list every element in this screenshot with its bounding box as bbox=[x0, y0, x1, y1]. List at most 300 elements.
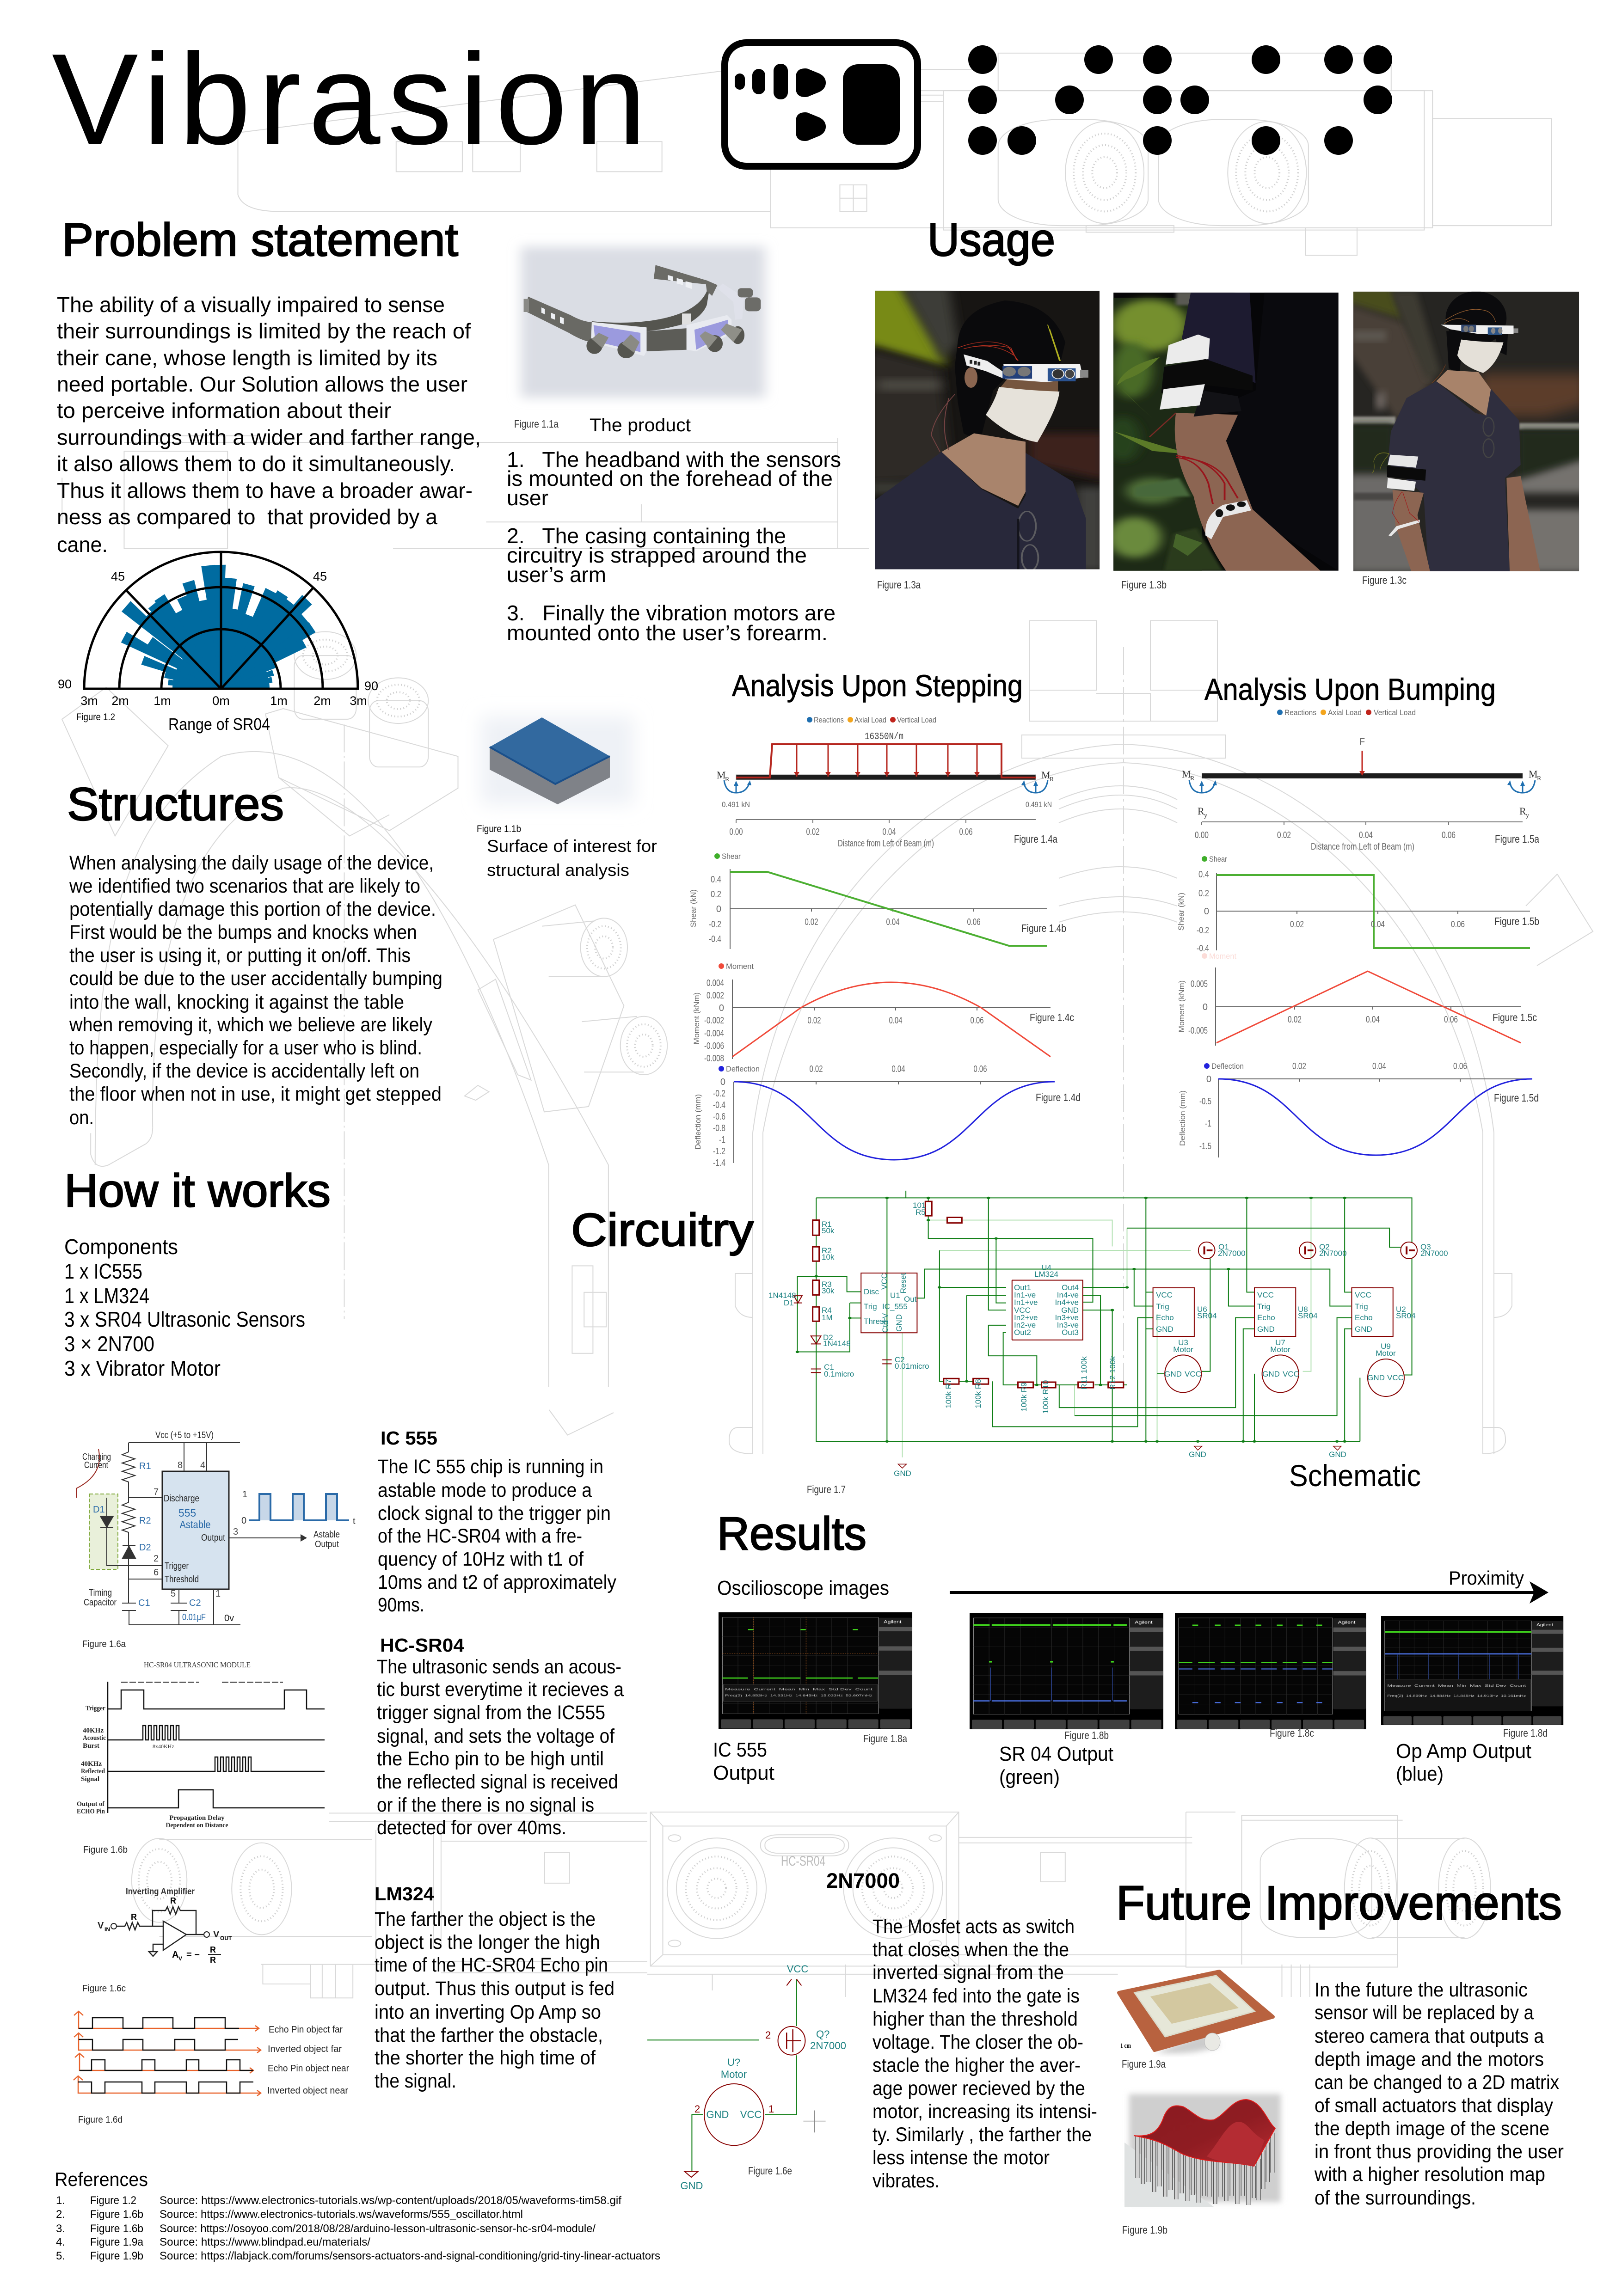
schematic labels: Out1 bbox=[1014, 1283, 1031, 1292]
text: 2N7000 body bbox=[872, 1916, 1097, 2192]
diagram: figure 1.6a 555 astable: 7 bbox=[154, 1487, 159, 1497]
text: 2N7000 body: vibrates. bbox=[872, 2170, 940, 2192]
chart: figure 1.4c moment: 0.04 bbox=[889, 1016, 903, 1026]
caption: figure 1.9a: Figure 1.9a bbox=[1122, 2058, 1166, 2070]
schematic labels: Motor bbox=[1270, 1345, 1290, 1354]
text: problem statement bbox=[57, 293, 481, 557]
diagram: figure 1.6a 555 astable: C2 bbox=[189, 1598, 201, 1608]
diagram: figure 1.6c inverting amplifier: V bbox=[178, 1955, 182, 1962]
schematic labels: In3-ve bbox=[1057, 1321, 1079, 1329]
text: 2N7000 body: voltage. The closer the ob- bbox=[872, 2031, 1083, 2053]
diagram: figure 1.6e mosfet motor: 2 bbox=[765, 2029, 771, 2041]
figure 1.9a: tactile display bbox=[1119, 1971, 1273, 2053]
label: SR 04 output bbox=[999, 1743, 1113, 1788]
text: reference list: Source: https://osoyoo.com/2018/08/28/arduino-lesson-ultrasonic-sensor-hc-sr04-module/ bbox=[160, 2223, 596, 2235]
heading: problem statement: Problem statement bbox=[62, 214, 458, 266]
schematic labels: U7 bbox=[1275, 1338, 1285, 1347]
chart: figure 1.4a beam load: R bbox=[1050, 776, 1054, 783]
schematic labels: Trig bbox=[1355, 1302, 1368, 1311]
text: problem statement: ness as compared to that provided by a bbox=[57, 505, 437, 529]
diagram: figure 1.6a 555 astable: C1 bbox=[138, 1598, 150, 1608]
diagram: figure 1.6c inverting amplifier: V bbox=[98, 1921, 104, 1931]
caption: figure 1.6c: Figure 1.6c bbox=[82, 1984, 126, 1994]
schematic labels: 0.01micro bbox=[895, 1362, 929, 1371]
diagram: figure 1.6a 555 astable: Vcc (+5 to +15V) bbox=[155, 1430, 214, 1440]
chart: figure 1.5b shear: 0.06 bbox=[1451, 919, 1465, 930]
text: 2N7000 body: motor, increasing its intensi- bbox=[872, 2100, 1097, 2123]
schematic labels: 100k R9 bbox=[1020, 1382, 1028, 1412]
diagram: figure 1.6a 555 astable: 1 bbox=[215, 1589, 221, 1599]
text: IC 555 body bbox=[378, 1456, 616, 1616]
caption: figure 1.6a: Figure 1.6a bbox=[82, 1639, 126, 1649]
text: problem statement: to perceive information about their bbox=[57, 398, 391, 422]
diagram: figure 1.6a 555 astable: 0.01µF bbox=[182, 1612, 206, 1623]
diagram: figure 1.6a 555 astable: 1 bbox=[242, 1489, 247, 1500]
caption: the product: The product bbox=[590, 415, 691, 435]
text: future improvements body: depth image and the motors bbox=[1315, 2048, 1544, 2070]
label: proximity: Proximity bbox=[1449, 1567, 1524, 1589]
chart: figure 1.4a beam load: M bbox=[717, 769, 726, 781]
schematic labels: U4 bbox=[1041, 1263, 1051, 1272]
heading: HC-SR04: HC-SR04 bbox=[380, 1635, 464, 1656]
chart: figure 1.5a beam point load: R bbox=[1519, 805, 1526, 817]
schematic labels: U6 bbox=[1197, 1305, 1207, 1314]
caption: figure 1.5d: Figure 1.5d bbox=[1494, 1092, 1539, 1104]
text: problem statement: their surroundings is limited by the reach of bbox=[57, 319, 471, 343]
text: components list: Components bbox=[64, 1235, 178, 1259]
chart: figure 1.5b shear: -0.4 bbox=[1197, 943, 1209, 954]
schematic labels: R2 bbox=[822, 1246, 832, 1255]
chart: polar range of SR04: 0m bbox=[212, 694, 230, 708]
chart: figure 1.4b shear: 0.06 bbox=[967, 917, 980, 927]
text: reference list: 4. bbox=[56, 2236, 65, 2248]
chart: figure 1.4a beam load: 0.491 kN bbox=[1026, 800, 1052, 809]
diagram: figure 1.6e mosfet motor: GND bbox=[681, 2180, 703, 2192]
text: HC-SR04 body: the reflected signal is received bbox=[377, 1771, 618, 1793]
text: surface of interest bbox=[487, 837, 657, 880]
caption: figure 1.4a: Figure 1.4a bbox=[1014, 833, 1057, 845]
text: problem statement: their cane, whose length is limited by its bbox=[57, 346, 437, 370]
diagram: figure 1.6c inverting amplifier bbox=[98, 1887, 232, 1965]
scope: figure 1.8c: Agilent bbox=[1338, 1620, 1355, 1624]
text: future improvements body: of small actuators that display bbox=[1315, 2094, 1553, 2117]
legend: bumping loads: Vertical Load bbox=[1374, 708, 1416, 717]
chart: polar range of SR04 bbox=[58, 552, 378, 708]
text: IC 555 body: astable mode to produce a bbox=[378, 1479, 592, 1501]
schematic labels: In2-ve bbox=[1014, 1321, 1036, 1329]
text: 2N7000 body: less intense the motor bbox=[872, 2147, 1050, 2169]
caption: range of SR04: Range of SR04 bbox=[168, 715, 270, 734]
diagram: figure 1.6c inverting amplifier: Inverting Amplifier bbox=[126, 1887, 195, 1897]
chart: figure 1.4d deflection: -0.4 bbox=[713, 1100, 725, 1110]
chart: figure 1.4a beam load: 0.06 bbox=[959, 827, 973, 837]
label: op amp output bbox=[1396, 1740, 1531, 1785]
chart: figure 1.5a beam point load: M bbox=[1182, 768, 1191, 780]
figure 1.9a: tactile display: 1 cm bbox=[1120, 2042, 1131, 2050]
chart: figure 1.5a beam point load: y bbox=[1526, 812, 1529, 819]
text: HC-SR04 body: or if the there is no signal is bbox=[377, 1794, 594, 1816]
schematic labels: Thresh bbox=[864, 1317, 888, 1326]
diagram: figure 1.6c inverting amplifier: A bbox=[172, 1950, 178, 1960]
chart: figure 1.4d deflection: -0.2 bbox=[713, 1089, 725, 1099]
diagram: figure 1.6e mosfet motor: VCC bbox=[740, 2109, 762, 2120]
diagram: figure 1.6b ultrasonic timing: Output of bbox=[77, 1800, 105, 1808]
schematic labels: In4+ve bbox=[1055, 1298, 1079, 1307]
schematic labels: Echo bbox=[1355, 1313, 1373, 1322]
diagram: figure 1.6a 555 astable: Timing bbox=[89, 1588, 112, 1598]
diagram: figure 1.6a 555 astable: 0 bbox=[241, 1516, 246, 1526]
chart: polar range of SR04: 90 bbox=[58, 677, 72, 691]
label: IC 555 output: Output bbox=[713, 1762, 774, 1784]
chart: figure 1.5a beam point load: y bbox=[1204, 812, 1207, 819]
diagram: figure 1.6e mosfet motor: VCC bbox=[787, 1963, 808, 1975]
schematic labels: R3 bbox=[822, 1280, 832, 1289]
text: 2N7000 body: LM324 fed into the gate is bbox=[872, 1985, 1080, 2007]
chart: polar range of SR04: 1m bbox=[154, 694, 171, 708]
schematic labels: 1N4148 bbox=[768, 1291, 796, 1300]
diagram: figure 1.6a 555 astable: Trigger bbox=[165, 1561, 189, 1571]
chart: figure 1.4b shear: 0.2 bbox=[711, 889, 721, 900]
caption: figure 1.8d: Figure 1.8d bbox=[1503, 1727, 1548, 1739]
schematic labels: VCC bbox=[1355, 1291, 1371, 1299]
schematic labels: 1N4148 bbox=[823, 1339, 851, 1348]
schematic labels: 0.1micro bbox=[824, 1370, 854, 1378]
text: problem statement: need portable. Our Solution allows the user bbox=[57, 372, 467, 396]
chart: figure 1.4c moment: Moment bbox=[726, 962, 754, 971]
caption: figure 1.7: Figure 1.7 bbox=[807, 1483, 846, 1495]
schematic labels: GND bbox=[1061, 1306, 1079, 1315]
text: HC-SR04 body: detected for over 40ms. bbox=[377, 1817, 566, 1839]
label: schematic: Schematic bbox=[1289, 1458, 1421, 1493]
text: reference list: Source: https://labjack.com/forums/sensors-actuators-and-signal-conditioning/grid-tiny-linear-actuators bbox=[160, 2250, 660, 2262]
chart: figure 1.4b shear: -0.2 bbox=[709, 919, 721, 930]
caption: figure 1.1b: Figure 1.1b bbox=[477, 824, 521, 834]
schematic labels: GND bbox=[1329, 1450, 1346, 1459]
diagram: figure 1.6a 555 astable: 8 bbox=[178, 1460, 183, 1470]
heading: future improvements: Future Improvements bbox=[1116, 1876, 1562, 1929]
text: components list: 1 x IC555 bbox=[64, 1259, 142, 1283]
chart: figure 1.5b shear: 0.02 bbox=[1290, 919, 1304, 930]
chart: figure 1.5c moment: Moment (kNm) bbox=[1177, 980, 1186, 1032]
label: op amp output: Op Amp Output bbox=[1396, 1740, 1531, 1763]
diagram: figure 1.6a 555 astable: Current bbox=[84, 1460, 108, 1470]
chart: figure 1.4a beam load: 0.491 kN bbox=[722, 800, 750, 809]
chart: figure 1.4c moment: -0.002 bbox=[704, 1016, 724, 1026]
chart: figure 1.4d deflection: -1.4 bbox=[713, 1158, 725, 1168]
diagram: figure 1.6b ultrasonic timing: HC-SR04 ULTRASONIC MODULE bbox=[144, 1660, 251, 1669]
text: future improvements body: In the future the ultrasonic bbox=[1315, 1979, 1528, 2001]
text: future improvements body: the depth image of the scene bbox=[1315, 2118, 1549, 2140]
text: reference list: 1. bbox=[56, 2194, 65, 2207]
chart: figure 1.4b shear: 0.4 bbox=[711, 875, 721, 885]
diagram: figure 1.6d echo waveforms: Inverted object far bbox=[268, 2044, 342, 2054]
caption: figure 1.3b: Figure 1.3b bbox=[1121, 579, 1167, 591]
chart: figure 1.5b shear: Shear bbox=[1209, 855, 1227, 863]
text: structures body: potentially damage this portion of the device. bbox=[69, 898, 436, 920]
schematic labels: Motor bbox=[1173, 1345, 1193, 1354]
diagram: figure 1.6a 555 astable: Discharge bbox=[164, 1494, 199, 1504]
schematic labels: 1M bbox=[822, 1313, 833, 1322]
schematic labels: Motor bbox=[1376, 1349, 1396, 1358]
schematic labels: 2N7000 bbox=[1218, 1249, 1246, 1258]
schematic labels: U1 bbox=[890, 1291, 900, 1300]
scope: figure 1.8c bbox=[1175, 1613, 1366, 1729]
schematic labels: SR04 bbox=[1298, 1311, 1318, 1320]
chart: figure 1.5d deflection: 0.02 bbox=[1292, 1061, 1306, 1071]
text: surface of interest: structural analysis bbox=[487, 861, 629, 880]
heading: structures: Structures bbox=[67, 778, 284, 830]
diagram: figure 1.6e mosfet motor: Motor bbox=[721, 2069, 747, 2080]
text: structures body: to happen, especially for a user who is blind. bbox=[69, 1037, 422, 1059]
diagram: figure 1.6a 555 astable: 6 bbox=[154, 1567, 159, 1578]
chart: figure 1.5d deflection: 0 bbox=[1206, 1074, 1211, 1084]
schematic labels: Trig bbox=[1156, 1302, 1169, 1311]
chart: figure 1.4c moment: 0.004 bbox=[707, 978, 724, 988]
background line art: curved headband left view bbox=[62, 631, 667, 1387]
text: IC 555 body: of the HC-SR04 with a fre- bbox=[378, 1525, 582, 1547]
caption: figure 1.8c: Figure 1.8c bbox=[1270, 1727, 1314, 1739]
caption: figure 1.6b: Figure 1.6b bbox=[83, 1845, 128, 1855]
chart: figure 1.4d deflection: 0 bbox=[720, 1077, 725, 1087]
text: product list: 1. The headband with the sensors bbox=[507, 447, 841, 471]
chart: figure 1.4c moment bbox=[692, 962, 1051, 1064]
caption: figure 1.1a: Figure 1.1a bbox=[514, 418, 559, 430]
chart: figure 1.5c moment: 0.02 bbox=[1288, 1015, 1302, 1025]
chart: figure 1.5a beam point load: Distance from Left of Beam (m) bbox=[1311, 842, 1414, 852]
heading: LM324: LM324 bbox=[375, 1883, 434, 1904]
chart: polar range of SR04: 2m bbox=[111, 694, 129, 708]
caption: figure 1.6e: Figure 1.6e bbox=[748, 2165, 792, 2177]
text: components list: 1 x LM324 bbox=[64, 1284, 149, 1308]
text: future improvements body: can be changed to a 2D matrix bbox=[1315, 2071, 1559, 2094]
text: structures body: the floor when not in use, it might get stepped bbox=[69, 1083, 442, 1105]
schematic labels: VCC bbox=[1283, 1370, 1299, 1378]
chart: figure 1.4a beam load: 0.02 bbox=[806, 827, 819, 837]
chart: figure 1.4c moment: -0.008 bbox=[704, 1053, 724, 1064]
legend: stepping loads bbox=[807, 716, 936, 724]
diagram: figure 1.6e mosfet motor: 1 bbox=[768, 2103, 774, 2115]
figure 1.1a: headband render bbox=[521, 246, 765, 398]
text: reference list: Figure 1.6b bbox=[90, 2208, 143, 2221]
diagram: figure 1.6e mosfet motor: 2N7000 bbox=[810, 2040, 846, 2051]
text: HC-SR04 body: signal, and sets the voltage of bbox=[377, 1725, 615, 1747]
chart: figure 1.4b shear: 0.04 bbox=[886, 917, 900, 927]
schematic labels: R1 bbox=[822, 1220, 832, 1229]
diagram: figure 1.6b ultrasonic timing: Trigger bbox=[86, 1705, 105, 1712]
chart: figure 1.5b shear: -0.2 bbox=[1197, 925, 1209, 936]
schematic labels: VCC bbox=[1014, 1306, 1031, 1315]
scope: figure 1.8b bbox=[970, 1613, 1163, 1729]
schematic labels: Out2 bbox=[1014, 1328, 1031, 1337]
diagram: figure 1.6c inverting amplifier: R bbox=[210, 1945, 216, 1954]
text: LM324 body: object is the longer the high bbox=[375, 1931, 600, 1953]
chart: figure 1.4a beam load: 16350N/m bbox=[865, 732, 903, 742]
diagram: figure 1.6a 555 astable bbox=[76, 1430, 356, 1625]
schematic labels: Disc bbox=[864, 1287, 879, 1296]
background line art: bottom sensor device bbox=[647, 1812, 1491, 1997]
diagram: figure 1.6a 555 astable: 2 bbox=[154, 1554, 159, 1564]
chart: figure 1.5a beam point load bbox=[1182, 737, 1542, 852]
arrow: proximity bbox=[950, 1581, 1548, 1604]
text: structures body: First would be the bumps and knocks when bbox=[69, 921, 417, 943]
schematic labels: GND bbox=[1355, 1325, 1372, 1334]
text: future improvements body: of the surroundings. bbox=[1315, 2187, 1476, 2209]
schematic labels bbox=[768, 1201, 1448, 1478]
diagram: figure 1.6a 555 astable: R2 bbox=[139, 1516, 151, 1526]
chart: figure 1.5c moment: 0.06 bbox=[1444, 1015, 1458, 1025]
heading: analysis upon stepping: Analysis Upon Stepping bbox=[732, 668, 1023, 703]
diagram: figure 1.6b ultrasonic timing: Signal bbox=[81, 1776, 99, 1783]
schematic labels: SR04 bbox=[1396, 1311, 1416, 1320]
schematic labels: GND bbox=[894, 1469, 911, 1478]
caption: figure 1.3c: Figure 1.3c bbox=[1362, 574, 1407, 586]
photo: figure 1.3c full body bbox=[1347, 287, 1585, 573]
schematic labels: VCC bbox=[880, 1273, 889, 1290]
braille title dots bbox=[968, 45, 1392, 155]
caption: figure 1.8b: Figure 1.8b bbox=[1064, 1729, 1109, 1741]
diagram: figure 1.6e mosfet motor: 2 bbox=[694, 2103, 700, 2115]
chart: figure 1.4c moment: 0.06 bbox=[970, 1016, 984, 1026]
heading: references: References bbox=[55, 2168, 148, 2190]
schematic labels: 100k R8 bbox=[974, 1379, 983, 1408]
text: future improvements body: in front thus providing the user bbox=[1315, 2141, 1564, 2163]
schematic labels: Out bbox=[904, 1295, 917, 1304]
text: product list: mounted onto the user’s forearm. bbox=[507, 621, 828, 645]
chart: figure 1.5d deflection: Deflection (mm) bbox=[1178, 1090, 1187, 1146]
text: 2N7000 body: The Mosfet acts as switch bbox=[872, 1916, 1075, 1938]
chart: figure 1.4a beam load bbox=[717, 732, 1054, 849]
diagram: figure 1.6a 555 astable: Astable bbox=[179, 1518, 211, 1531]
heading: circuitry: Circuitry bbox=[571, 1204, 754, 1256]
diagram: figure 1.6e mosfet motor: Q? bbox=[816, 2028, 829, 2040]
text: problem statement: cane. bbox=[57, 533, 108, 557]
text: structures body: we identified two scenarios that are likely to bbox=[69, 875, 420, 897]
schematic labels: GND bbox=[1257, 1325, 1275, 1334]
caption: figure 1.9b: Figure 1.9b bbox=[1122, 2224, 1167, 2236]
chart: figure 1.5d deflection: -1 bbox=[1205, 1119, 1211, 1129]
schematic labels: C2 bbox=[895, 1355, 905, 1364]
diagram: figure 1.6a 555 astable: Threshold bbox=[165, 1574, 199, 1585]
chart: figure 1.5d deflection: 0.04 bbox=[1372, 1061, 1386, 1071]
chart: figure 1.5d deflection bbox=[1178, 1061, 1532, 1157]
text: reference list: Figure 1.6b bbox=[90, 2223, 143, 2235]
chart: figure 1.4b shear: -0.4 bbox=[709, 934, 721, 944]
text: structures body bbox=[69, 852, 442, 1129]
chart: figure 1.5c moment: -0.005 bbox=[1188, 1026, 1208, 1036]
legend: bumping loads: Reactions bbox=[1284, 708, 1316, 717]
schematic labels: Echo bbox=[1156, 1313, 1174, 1322]
text: future improvements body: with a higher resolution map bbox=[1314, 2163, 1545, 2186]
chart: figure 1.4c moment: Moment (kNm) bbox=[692, 992, 701, 1044]
chart: figure 1.4b shear: Shear bbox=[722, 852, 741, 861]
text: IC 555 body: The IC 555 chip is running in bbox=[378, 1456, 603, 1478]
schematic labels: GND bbox=[1367, 1373, 1385, 1382]
text: components list: 3 x Vibrator Motor bbox=[64, 1356, 221, 1380]
text: reference list: Source: https://www.electronics-tutorials.ws/waveforms/555_oscillator.html bbox=[160, 2208, 523, 2221]
caption: figure 1.3a: Figure 1.3a bbox=[877, 579, 921, 591]
chart: figure 1.4a beam load: M bbox=[1041, 769, 1051, 781]
text: HC-SR04 body: tic burst everytime it recieves a bbox=[377, 1678, 624, 1701]
schematic: figure 1.7 wiring bbox=[794, 1191, 1417, 1468]
chart: figure 1.4b shear: 0.02 bbox=[805, 917, 818, 927]
caption: figure 1.4d: Figure 1.4d bbox=[1036, 1091, 1081, 1103]
diagram: figure 1.6a 555 astable: Output bbox=[315, 1539, 339, 1549]
text: 2N7000 body: age power recieved by the bbox=[872, 2077, 1085, 2100]
text: 2N7000 body: stacle the higher the aver- bbox=[872, 2054, 1081, 2076]
chart: figure 1.5b shear: 0.2 bbox=[1198, 888, 1209, 899]
label: SR 04 output: SR 04 Output bbox=[999, 1743, 1113, 1765]
text: problem statement: it also allows them to do it simultaneously. bbox=[57, 452, 455, 476]
schematic labels: In2+ve bbox=[1014, 1313, 1038, 1322]
legend: stepping loads: Axial Load bbox=[854, 716, 886, 724]
diagram: figure 1.6e mosfet motor: U? bbox=[727, 2057, 740, 2068]
diagram: figure 1.6b ultrasonic timing bbox=[77, 1660, 325, 1829]
scope: figure 1.8d: Measure Current Mean Min Max Std Dev Count bbox=[1387, 1684, 1526, 1688]
chart: figure 1.5b shear: 0 bbox=[1204, 906, 1209, 917]
schematic labels: 2N7000 bbox=[1319, 1249, 1347, 1258]
schematic labels: C1 bbox=[824, 1363, 834, 1371]
legend: bumping loads bbox=[1277, 708, 1416, 717]
diagram: figure 1.6b ultrasonic timing: Propagation Delay bbox=[169, 1814, 225, 1822]
chart: figure 1.4c moment: 0 bbox=[719, 1003, 724, 1013]
caption: figure 1.5b: Figure 1.5b bbox=[1494, 915, 1539, 927]
chart: polar range of SR04: 2m bbox=[313, 694, 331, 708]
diagram: figure 1.6b ultrasonic timing: Burst bbox=[83, 1742, 99, 1750]
schematic labels: Q1 bbox=[1218, 1243, 1229, 1251]
text: HC-SR04 body: trigger signal from the IC555 bbox=[377, 1702, 605, 1724]
chart: figure 1.4b shear: 0 bbox=[716, 904, 721, 914]
chart: figure 1.4d deflection: -1.2 bbox=[713, 1146, 725, 1157]
text: LM324 body: into an inverting Op Amp so bbox=[375, 2001, 601, 2023]
chart: figure 1.5c moment: 0.005 bbox=[1191, 979, 1208, 989]
diagram: figure 1.6a 555 astable: 4 bbox=[200, 1460, 205, 1470]
diagram: figure 1.6a 555 astable: 5 bbox=[171, 1589, 176, 1599]
heading: IC 555: IC 555 bbox=[381, 1427, 437, 1449]
text: LM324 body: the shorter the high time of bbox=[375, 2047, 596, 2069]
text: components list: 3 x SR04 Ultrasonic Sensors bbox=[64, 1307, 305, 1331]
photo: figure 1.3b arm casing bbox=[1105, 292, 1339, 573]
diagram: figure 1.6c inverting amplifier: IN bbox=[104, 1926, 110, 1933]
heading: results: Results bbox=[717, 1508, 866, 1560]
text: 2N7000 body: higher than the threshold bbox=[872, 2008, 1078, 2030]
chart: polar range of SR04: 90 bbox=[364, 679, 378, 693]
chart: figure 1.5c moment: 0.04 bbox=[1366, 1015, 1380, 1025]
chart: figure 1.4d deflection: 0.02 bbox=[809, 1064, 823, 1074]
diagram: figure 1.6b ultrasonic timing: 40KHz bbox=[81, 1760, 102, 1768]
schematic labels: In1-ve bbox=[1014, 1291, 1036, 1299]
chart: figure 1.5a beam point load: 0.02 bbox=[1277, 830, 1291, 840]
text: structures body: on. bbox=[69, 1107, 94, 1129]
text: reference list: Source: https://www.electronics-tutorials.ws/wp-content/uploads/2018/05/waveforms-tim58.gif bbox=[160, 2194, 621, 2207]
legend: stepping loads: Vertical Load bbox=[897, 716, 936, 724]
text: product list bbox=[507, 447, 841, 645]
text: product list: 2. The casing containing the bbox=[507, 524, 786, 548]
chart: figure 1.5a beam point load: R bbox=[1537, 775, 1542, 782]
schematic labels: SR04 bbox=[1197, 1311, 1217, 1320]
chart: figure 1.4c moment: -0.004 bbox=[704, 1029, 724, 1039]
text: LM324 body: time of the HC-SR04 Echo pin bbox=[375, 1954, 608, 1976]
text: LM324 body bbox=[375, 1908, 614, 2092]
chart: figure 1.4a beam load: Distance from Left of Beam (m) bbox=[838, 839, 934, 849]
text: surface of interest: Surface of interest for bbox=[487, 837, 657, 856]
text: LM324 body: the signal. bbox=[375, 2070, 456, 2092]
chart: figure 1.5b shear: Shear (kN) bbox=[1177, 893, 1186, 931]
diagram: figure 1.6e mosfet motor bbox=[647, 1963, 846, 2192]
schematic labels: Echo bbox=[1257, 1313, 1275, 1322]
background line art: left sensor cylinders bbox=[132, 1410, 647, 1998]
text: product list: user bbox=[507, 486, 548, 510]
schematic labels: R4 bbox=[822, 1306, 832, 1315]
